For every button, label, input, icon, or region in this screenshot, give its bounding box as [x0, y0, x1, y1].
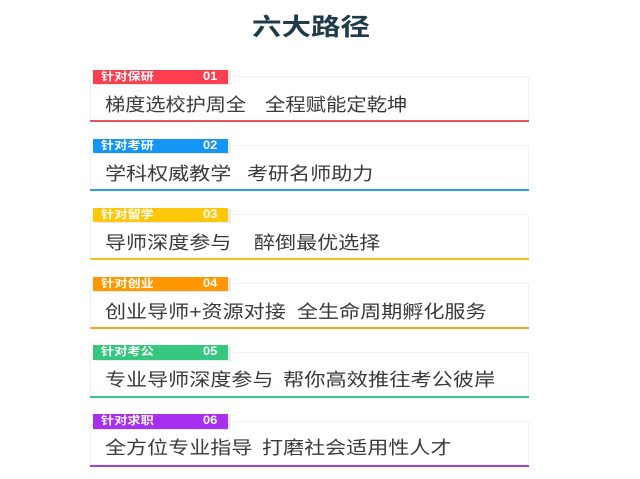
text 1: [104, 94, 407, 114]
text 1: 梯度选校护周全: [104, 94, 246, 114]
tag 6: 针对求职: [101, 415, 154, 427]
text 3: 导师深度参与: [104, 232, 231, 252]
card body 3: [90, 214, 528, 260]
tag 1: [93, 70, 228, 84]
tag 3: 03: [203, 208, 217, 220]
panel: 针对保研: [90, 70, 529, 122]
card body 6: [90, 421, 528, 467]
card body 2: [90, 145, 528, 191]
text 3: 醉倒最优选择: [254, 232, 380, 252]
text 2: 考研名师助力: [246, 164, 373, 184]
text 4: 创业导师+资源对接: [104, 302, 285, 322]
tag 1: 01: [203, 70, 217, 82]
tag 4: [93, 276, 228, 291]
tag 5: 针对考公: [101, 346, 154, 358]
text 2: 学科权威教学: [104, 164, 231, 184]
text 5: 帮你高效推往考公彼岸: [283, 370, 495, 390]
text 4: [104, 302, 486, 322]
tag 1: 针对保研: [101, 70, 154, 82]
card body 1: [90, 76, 528, 122]
card body 5: [90, 352, 528, 398]
text 6: 打磨社会适用性人才: [262, 438, 452, 458]
text 5: 专业导师深度参与: [104, 370, 273, 390]
tag 2: 02: [203, 140, 217, 152]
text 6: 全方位专业指导: [104, 438, 252, 458]
tag 2: 针对考研: [101, 140, 154, 152]
panel: 针对留学: [90, 208, 529, 260]
tag 5: [93, 345, 228, 360]
tag 4: 04: [203, 278, 217, 290]
text 4: 全生命周期孵化服务: [296, 302, 486, 322]
text 3: [104, 232, 380, 252]
text 2: [104, 164, 373, 184]
tag 4: 针对创业: [101, 278, 154, 290]
panel: 针对创业: [90, 277, 529, 329]
tag 3: 针对留学: [101, 208, 154, 220]
text 6: [104, 438, 452, 458]
panel: 针对考研: [90, 139, 529, 191]
text 5: [104, 370, 495, 390]
text 1: 全程赋能定乾坤: [264, 94, 407, 114]
tag 3: [93, 208, 228, 222]
tag 6: 06: [203, 415, 217, 427]
tag 5: 05: [203, 346, 217, 358]
title: 六大路径: [252, 14, 370, 41]
card body 4: [90, 283, 528, 329]
tag 6: [93, 414, 228, 428]
tag 2: [93, 138, 228, 153]
